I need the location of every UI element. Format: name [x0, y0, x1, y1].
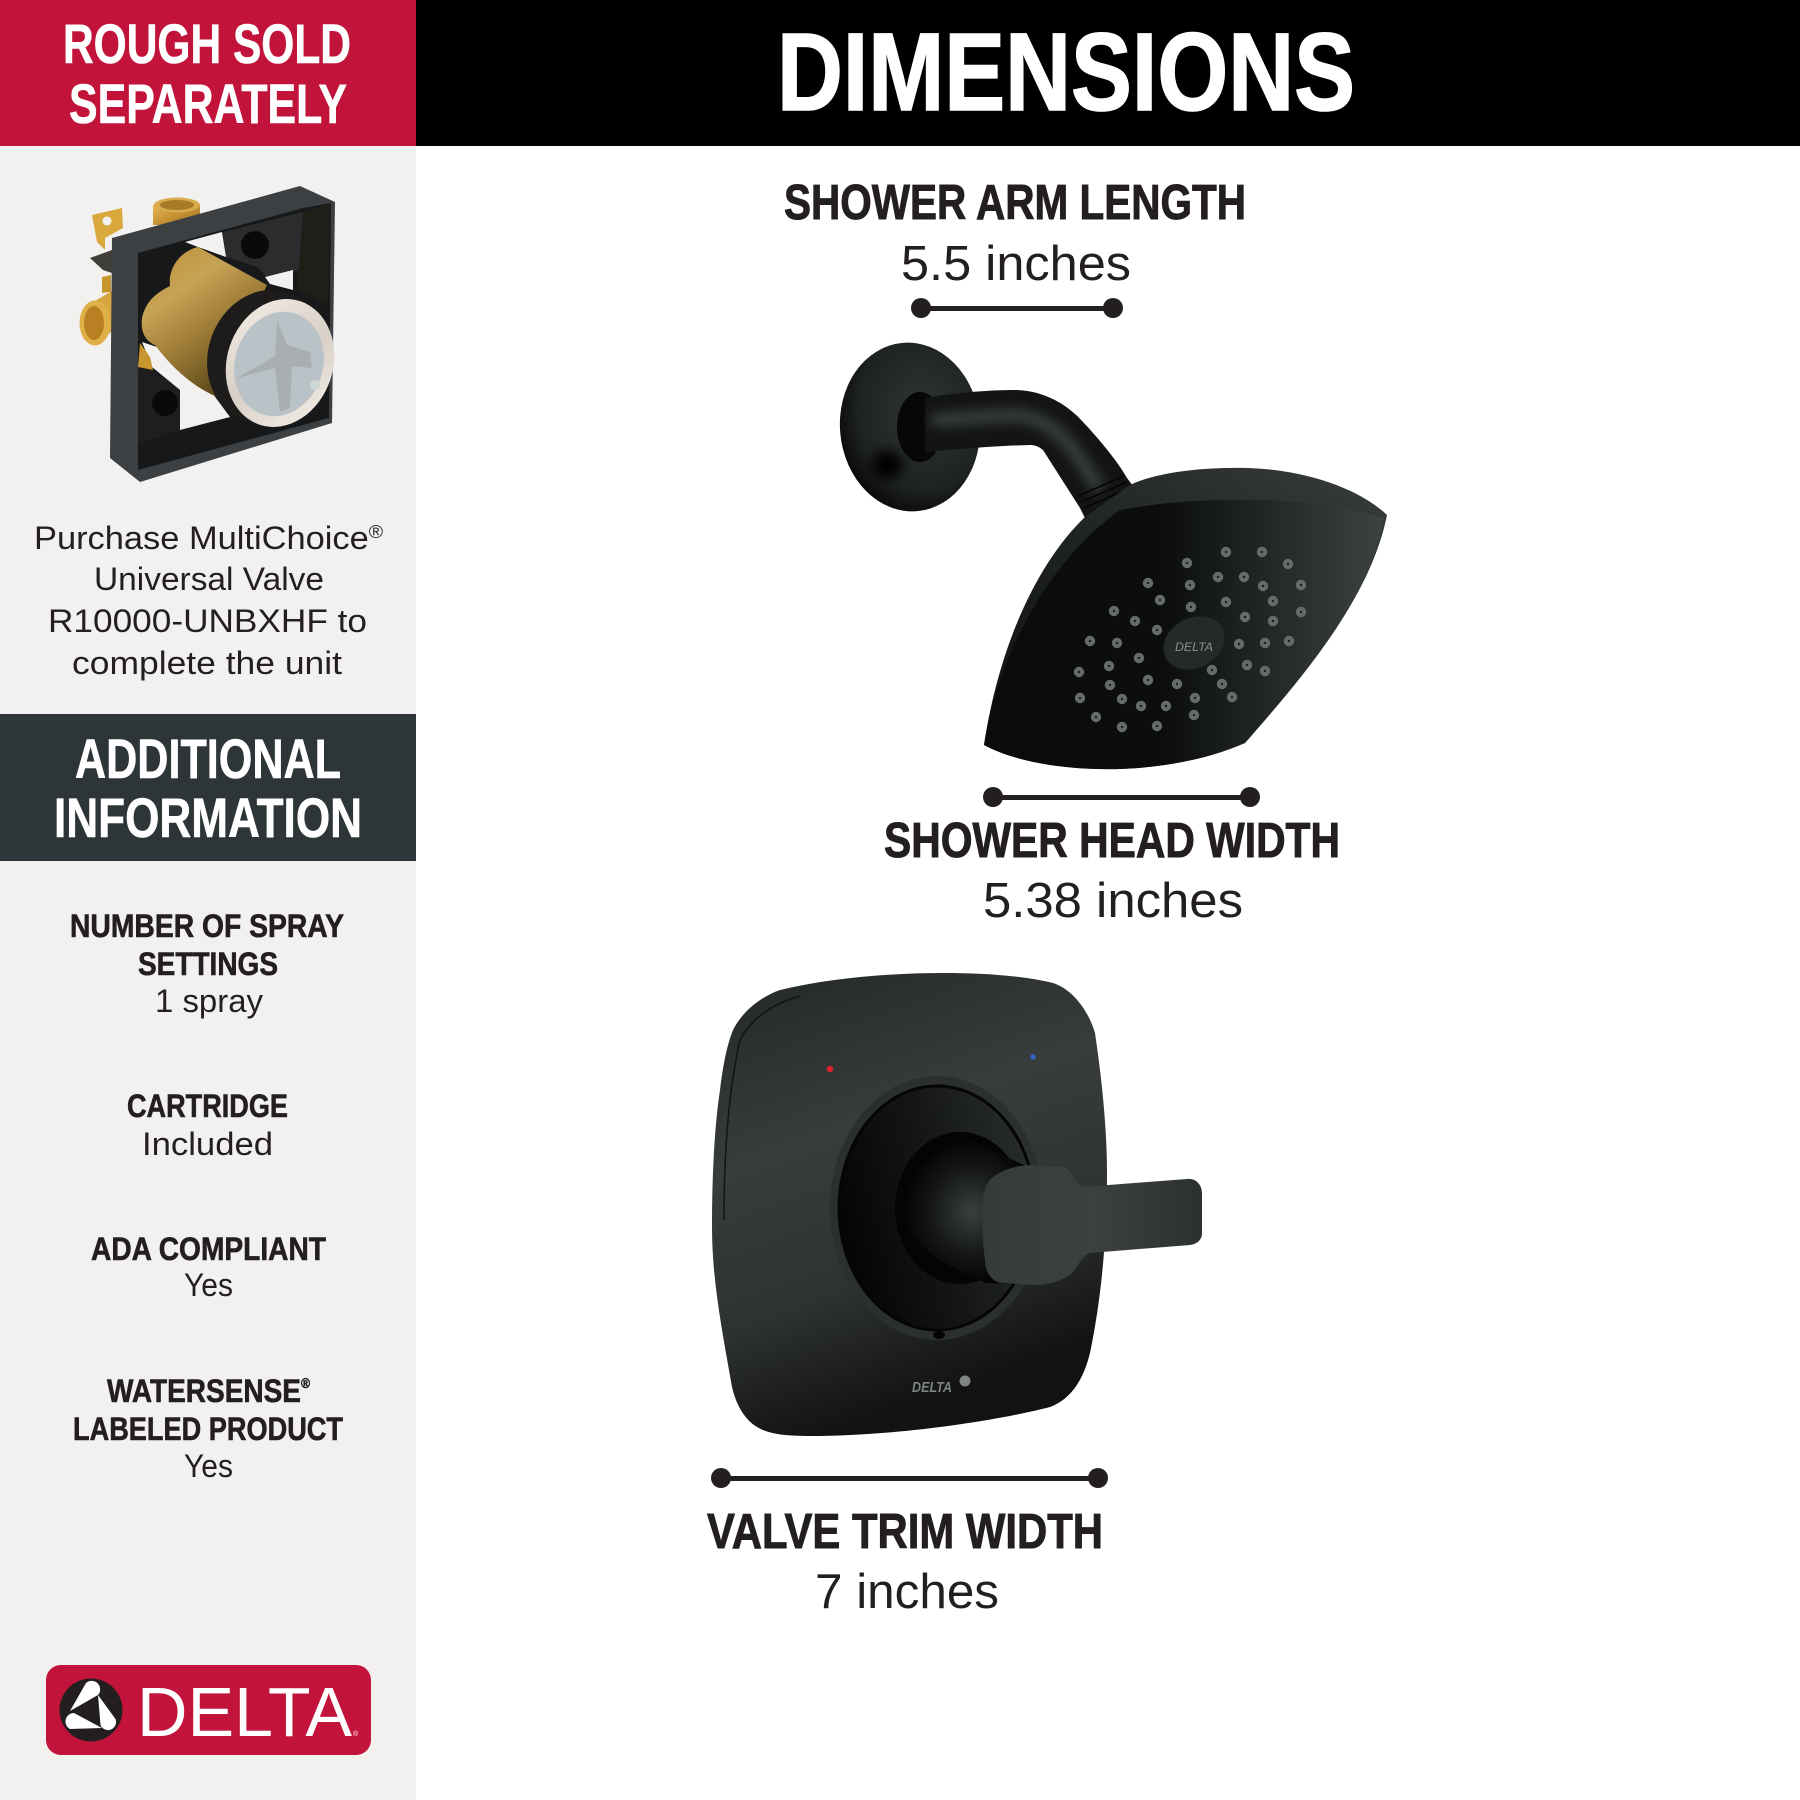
banner: rough sold separately: ROUGH SOLD — [63, 12, 351, 75]
dimension line: shower arm — [911, 298, 1123, 318]
arm — [925, 390, 1136, 520]
text: purchase note: Purchase MultiChoice — [34, 520, 345, 556]
label: shower arm length: 5.5 inches — [901, 237, 1131, 291]
neck — [897, 392, 943, 462]
spec: watersense labeled product: WATERSENSE — [107, 1373, 329, 1409]
image: rough valve product — [80, 186, 350, 482]
label: valve trim width: 7 inches — [815, 1565, 999, 1619]
banner: dimensions title — [416, 0, 1800, 146]
head face — [984, 500, 1384, 769]
label: shower head width — [884, 814, 1340, 928]
brass fittings behind the box — [80, 198, 200, 346]
text: purchase note: complete the unit — [72, 645, 342, 681]
label: shower arm length: SHOWER ARM LENGTH — [784, 176, 1246, 230]
dimension line: shower head — [983, 787, 1260, 807]
spec: ada compliant: Yes — [184, 1267, 233, 1303]
brand mark: DELTA — [912, 1379, 952, 1396]
heading: additional information — [0, 714, 416, 861]
spec: watersense labeled product: LABELED PRODUCT — [73, 1411, 343, 1447]
spray nozzles — [1076, 549, 1304, 730]
back panels — [223, 212, 303, 277]
spec: cartridge: CARTRIDGE — [127, 1088, 288, 1124]
dimension line: valve trim — [711, 1468, 1108, 1488]
heading: additional information: ADDITIONAL — [75, 727, 341, 790]
logo: delta: ® — [353, 1730, 359, 1738]
spec: ada compliant — [91, 1231, 326, 1303]
spec: number of spray settings: SETTINGS — [138, 946, 278, 982]
escutcheon — [830, 1076, 1044, 1340]
spec: number of spray settings: NUMBER OF SPRAY — [70, 908, 344, 944]
handle base — [895, 1132, 1025, 1284]
label: shower head width: SHOWER HEAD WIDTH — [884, 814, 1340, 868]
label: valve trim width — [707, 1505, 1103, 1619]
text: purchase note: Universal Valve — [94, 561, 324, 597]
label: shower head width: 5.38 inches — [983, 874, 1243, 928]
text: purchase note: ® — [369, 522, 383, 542]
spec: watersense labeled product: Yes — [184, 1448, 233, 1484]
text: purchase note: R10000-UNBXHF to — [48, 603, 367, 639]
spec: watersense labeled product: ® — [301, 1375, 311, 1391]
see-through openings — [185, 232, 226, 257]
center badge: DELTA — [1175, 640, 1213, 654]
spec: ada compliant: ADA COMPLIANT — [91, 1231, 326, 1267]
spec: cartridge: Included — [142, 1126, 273, 1162]
panel: left sidebar background — [0, 0, 416, 1800]
indicator dots — [827, 1066, 833, 1072]
black collar — [190, 274, 344, 440]
lower bracket and screws — [138, 367, 180, 444]
banner: rough sold separately: SEPARATELY — [69, 72, 347, 135]
spec: number of spray settings — [70, 908, 344, 1019]
handle cone — [903, 1138, 1040, 1285]
plastic mounting box — [110, 186, 335, 482]
spec: cartridge — [127, 1088, 288, 1162]
banner: rough sold separately — [0, 0, 416, 146]
silver ring and cap — [210, 285, 350, 441]
brass valve body — [142, 247, 267, 396]
center badge — [1154, 606, 1234, 680]
label: valve trim width: VALVE TRIM WIDTH — [707, 1505, 1103, 1559]
logo: delta: DELTA — [137, 1673, 352, 1751]
brand mark — [912, 1376, 970, 1396]
image: shower head and arm — [833, 337, 1387, 769]
banner: dimensions title: DIMENSIONS — [777, 11, 1355, 134]
trim plate — [712, 973, 1107, 1436]
image: valve trim — [712, 973, 1202, 1436]
spec: number of spray settings: 1 spray — [155, 983, 263, 1019]
text: purchase note — [34, 520, 383, 681]
logo: delta — [46, 1665, 371, 1755]
label: shower arm length — [784, 176, 1246, 291]
flange — [833, 337, 987, 517]
heading: additional information: INFORMATION — [54, 786, 362, 849]
spec: watersense labeled product — [73, 1373, 343, 1484]
handle paddle — [982, 1165, 1202, 1285]
head shell — [984, 468, 1387, 769]
